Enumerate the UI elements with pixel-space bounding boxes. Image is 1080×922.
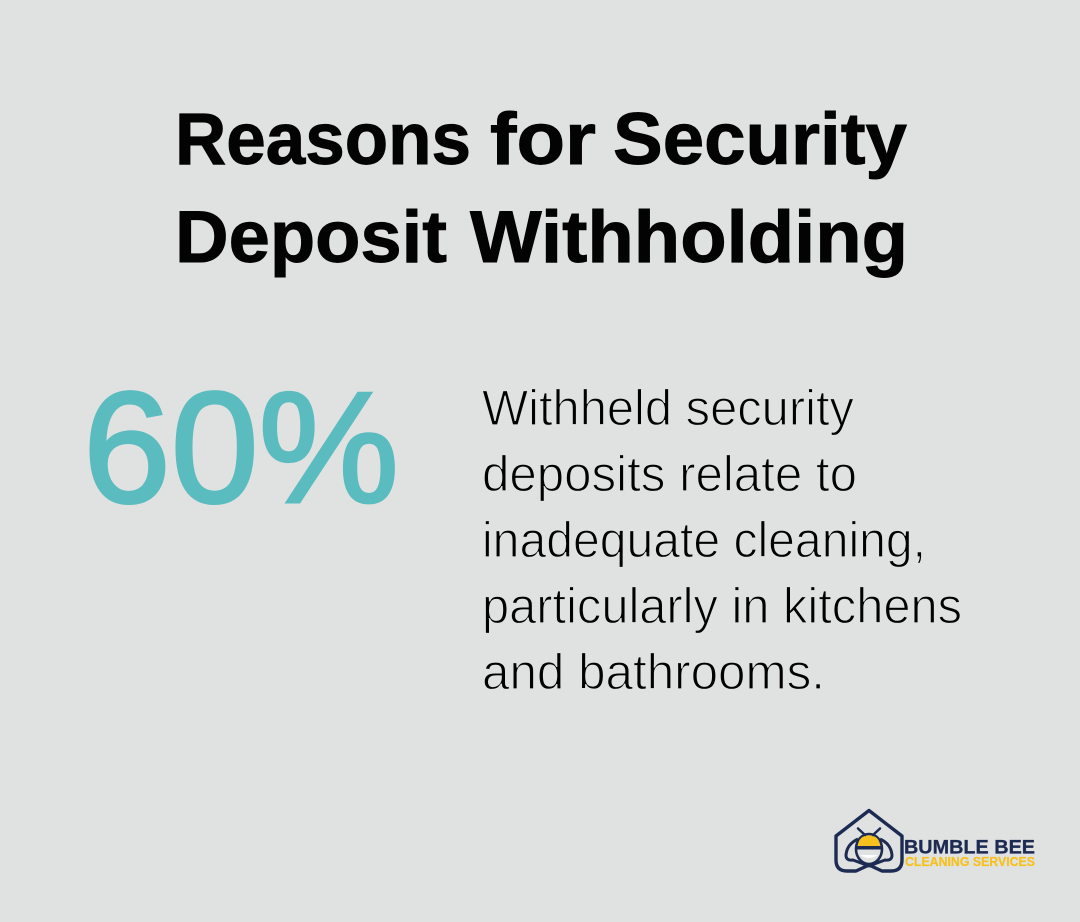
- title: Deposit: [175, 197, 447, 278]
- icon: bee: [846, 828, 892, 866]
- title: [175, 99, 908, 278]
- description text: and bathrooms.: [482, 644, 825, 700]
- logo tagline: CLEANING SERVICES: [905, 855, 1035, 869]
- description text: deposits relate to: [482, 446, 857, 502]
- logo wordmark: BUMBLE BEE: [904, 836, 1035, 858]
- description text: Withheld security: [482, 380, 854, 436]
- logo: Bumble Bee Cleaning Services: [836, 810, 1035, 871]
- title: Withholding: [470, 197, 908, 278]
- title: for: [490, 99, 596, 180]
- description text: [482, 380, 962, 700]
- description text: particularly in kitchens: [482, 578, 962, 634]
- title: Reasons: [175, 99, 471, 180]
- icon: house outline: [836, 810, 902, 871]
- statistic: 60%: 60%: [83, 360, 399, 536]
- description text: inadequate cleaning,: [482, 512, 926, 568]
- title: Security: [613, 99, 907, 180]
